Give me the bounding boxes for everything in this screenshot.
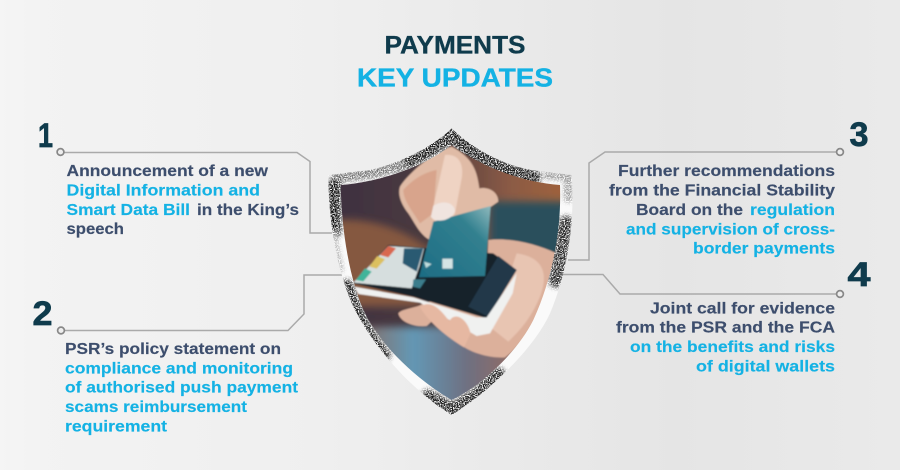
number 2: 2 (32, 295, 52, 333)
text block 2: compliance and monitoring (65, 360, 293, 377)
text block 2: of authorised push payment (65, 380, 298, 397)
text block 1: Smart Data Bill (66, 202, 190, 219)
text block 3 (609, 163, 836, 258)
connector 3 (568, 149, 843, 260)
item 4 (616, 256, 871, 376)
number 4: 4 (848, 256, 871, 294)
text block 3: and supervision of cross- (626, 221, 835, 238)
title: PAYMENTS (384, 31, 526, 59)
text block 3: Board on the (636, 202, 743, 219)
item 3 (609, 116, 868, 258)
terminal (353, 245, 517, 318)
title (357, 31, 553, 93)
text block 1: Digital Information and (66, 182, 260, 200)
text block 2 (65, 341, 298, 436)
item 2 (32, 295, 298, 436)
text block 3: border payments (693, 240, 835, 258)
photo (340, 145, 560, 400)
text block 4: from the PSR and the FCA (616, 320, 835, 337)
text block 4: Joint call for evidence (650, 300, 835, 317)
text block 2: requirement (65, 419, 167, 436)
text block 3: Further recommendations (618, 163, 835, 180)
connector 1 (57, 149, 332, 233)
item 1 (38, 117, 299, 238)
title: KEY UPDATES (357, 65, 553, 93)
text block 3: regulation (750, 202, 835, 219)
connector 4 (558, 274, 843, 297)
lower hand (398, 239, 557, 357)
upper hand (399, 147, 498, 240)
number 1: 1 (38, 117, 53, 155)
number 3: 3 (850, 116, 868, 154)
text block 2: PSR’s policy statement on (65, 341, 281, 358)
text block 3: from the Financial Stability (609, 182, 836, 200)
shield border (328, 128, 572, 415)
text block 2: scams reimbursement (65, 399, 247, 416)
text block 1: in the King’s (197, 202, 299, 219)
text block 1: Announcement of a new (66, 163, 268, 180)
text block 4: on the benefits and risks (630, 339, 835, 356)
shield with payment photo (328, 128, 572, 415)
text block 4 (616, 300, 835, 376)
connector 2 (58, 275, 342, 334)
text block 1: speech (66, 221, 124, 238)
text block 1 (66, 163, 299, 238)
text block 4: of digital wallets (696, 359, 835, 376)
card (419, 206, 491, 277)
shield grunge texture (333, 135, 568, 410)
